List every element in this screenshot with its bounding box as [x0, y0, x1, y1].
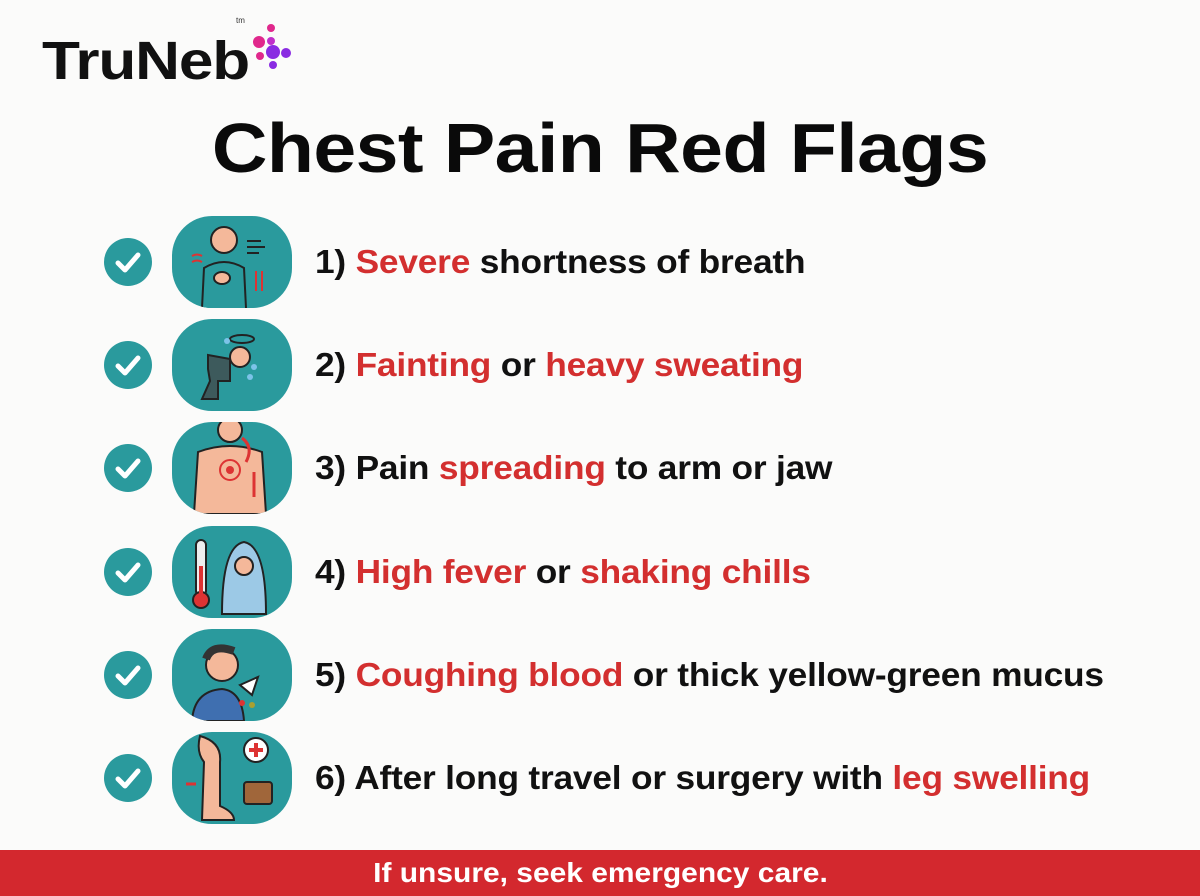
row 1: [104, 216, 805, 308]
row 2: 2) Fainting or heavy sweating: [315, 346, 803, 383]
row 4: 4) High fever or shaking chills: [315, 553, 811, 590]
row 3: 3) Pain spreading to arm or jaw: [315, 449, 832, 486]
footer banner: If unsure, seek emergency care.: [373, 857, 827, 888]
row 1: 1) Severe shortness of breath: [315, 243, 805, 280]
row 2: [104, 319, 803, 411]
icon: leg swelling travel: [172, 732, 292, 824]
logo: [42, 16, 291, 91]
row 6: [104, 732, 1090, 824]
icon: shortness of breath: [172, 216, 292, 308]
logo: TruNeb: [42, 31, 249, 91]
icon: fever chills: [172, 526, 292, 618]
footer banner: [0, 850, 1200, 896]
row 5: 5) Coughing blood or thick yellow-green mucus: [315, 656, 1104, 693]
title: Chest Pain Red Flags: [212, 109, 988, 187]
icon: coughing blood: [172, 629, 292, 721]
row 3: [104, 422, 832, 514]
icon: pain spreading: [172, 422, 292, 514]
icon: fainting: [172, 319, 292, 411]
row 4: [104, 526, 811, 618]
row 5: [104, 629, 1104, 721]
logo: tm: [236, 16, 245, 25]
row 6: 6) After long travel or surgery with leg swelling: [315, 759, 1090, 796]
